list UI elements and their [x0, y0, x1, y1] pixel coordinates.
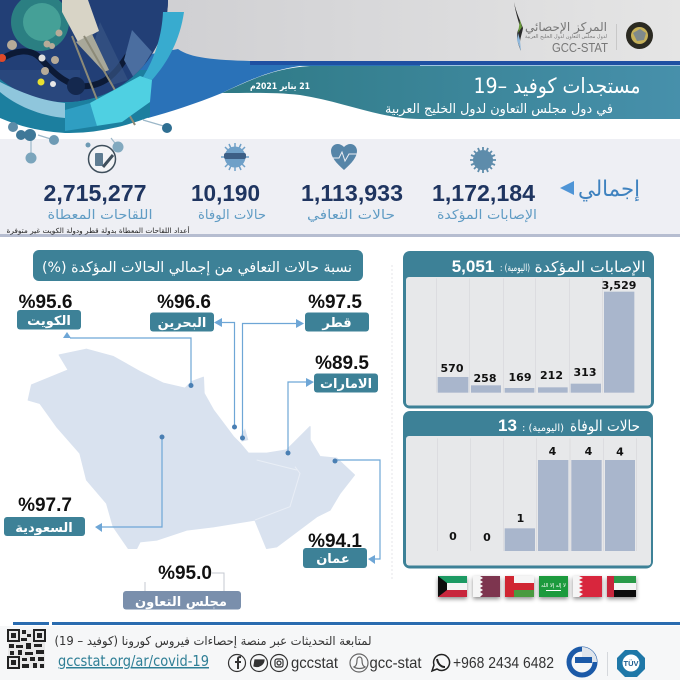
- heading: 5,051: [452, 257, 494, 276]
- hero image: vaccine circle: [0, 0, 184, 133]
- label: Qatar: [305, 292, 369, 332]
- panel: daily deaths: [403, 411, 653, 568]
- flag: Oman: [505, 576, 534, 597]
- URL: gccstat.org/ar/covid-19: [58, 652, 209, 670]
- stat: recovered: 1,113,933: [301, 180, 403, 206]
- label: Kuwait: [17, 292, 81, 330]
- bar chart: [437, 438, 637, 551]
- stat: vaccines: [44, 146, 152, 223]
- bar values: 313: [574, 366, 596, 379]
- heading: (اليومية) :: [522, 423, 564, 434]
- QR code: [8, 630, 45, 668]
- label: Kuwait: الكويت: [27, 314, 71, 329]
- heading: [498, 416, 640, 435]
- stat: confirmed: [432, 147, 537, 223]
- label: Qatar: %97.5: [308, 292, 362, 313]
- label: UAE: الامارات: [320, 377, 372, 392]
- connector dots: [160, 383, 338, 464]
- bar values: 258: [474, 372, 496, 385]
- phone: +968 2434 6482: [453, 655, 554, 672]
- stat: deaths: 10,190: [191, 180, 260, 206]
- bar values: 1: [517, 512, 524, 525]
- label: Bahrain: البحرين: [158, 316, 206, 331]
- heading: الإصابات المؤكدة: [534, 258, 646, 276]
- label: Saudi Arabia: [4, 495, 85, 536]
- bar values: 212: [540, 369, 563, 382]
- follow text: لمتابعة التحديثات عبر منصة إحصاءات فيروس كورونا (كوفيد – 19): [54, 634, 372, 649]
- bar values: 4: [549, 445, 557, 458]
- label: Saudi Arabia: السعودية: [15, 521, 73, 536]
- bar values: 3,529: [602, 279, 636, 292]
- stat: vaccines: اللقاحات المعطاة: [48, 208, 152, 223]
- social handle: gccstat: [291, 655, 339, 672]
- panel: daily confirmed cases: [403, 251, 654, 408]
- title: مستجدات كوفيد –19: [474, 74, 640, 98]
- heading: [452, 257, 646, 276]
- header background: [0, 0, 680, 139]
- decorative molecule: [8, 120, 172, 164]
- logo: certification ring: [569, 647, 597, 675]
- stat: deaths: [191, 143, 266, 223]
- bar values: 4: [616, 446, 624, 458]
- vaccine footnote: أعداد اللقاحات المعطاة بدولة قطر ودولة الكويت غير متوفرة: [6, 226, 190, 235]
- header title band: [222, 66, 680, 119]
- logo: TUV: TÜV: [624, 659, 638, 668]
- logo: GCC-STAT: GCC-STAT: [552, 40, 608, 55]
- flag: Kuwait: [438, 576, 467, 597]
- label: Bahrain: [150, 292, 214, 332]
- label: Kuwait: %95.6: [19, 292, 72, 313]
- connector arrows: [63, 318, 375, 564]
- label: Oman: عمان: [316, 552, 350, 567]
- icon: heart: [331, 144, 357, 170]
- bar values: 0: [483, 531, 491, 544]
- bar values: 570: [441, 362, 464, 375]
- bar values: 0: [449, 530, 457, 543]
- flag: UAE: [607, 576, 636, 597]
- label: Bahrain: %96.6: [157, 292, 211, 313]
- heading: (اليومية) :: [500, 263, 530, 274]
- flag: Qatar: [473, 576, 500, 597]
- subtitle: في دول مجلس التعاون لدول الخليج العربية: [385, 102, 613, 117]
- label: GCC: مجلس التعاون: [135, 595, 227, 610]
- flag: Bahrain: [573, 576, 602, 597]
- logo: GCC-STAT: المركز الإحصائي: [525, 20, 607, 35]
- logo: GCC-STAT: لدول مجلس التعاون لدول الخليج العربية: [525, 34, 607, 40]
- logo: TUV: [617, 650, 645, 677]
- bar values: [449, 445, 624, 544]
- icon: vial and syringe: [88, 146, 116, 172]
- emblem: [626, 22, 653, 49]
- stat: deaths: حالات الوفاة: [198, 208, 266, 223]
- logo: GCC-STAT: [514, 2, 653, 55]
- heading: [33, 250, 363, 281]
- label: GCC: %95.0: [158, 563, 212, 584]
- stat: recovered: [301, 144, 403, 223]
- map: [28, 349, 354, 548]
- label: UAE: [314, 353, 378, 392]
- bar chart: [436, 278, 634, 393]
- heading: حالات الوفاة: [570, 417, 640, 435]
- icon: whatsapp: [432, 654, 450, 671]
- bar values: 4: [585, 445, 593, 458]
- flag: Saudi Arabia: [539, 576, 568, 597]
- icon: virus with bed: [221, 143, 249, 171]
- icon: snapchat: [350, 654, 368, 672]
- snapchat handle: gcc-stat: [370, 655, 422, 672]
- bar values: [441, 279, 636, 385]
- date: 21 يناير 2021م: [250, 82, 310, 92]
- flag: Saudi Arabia: لا إله إلا الله: [541, 583, 566, 589]
- icons: social: [228, 654, 288, 672]
- bar values: 169: [509, 371, 531, 384]
- stat: total label: إجمالي: [578, 177, 640, 202]
- heading: نسبة حالات التعافي من إجمالي الحالات المؤكدة (%): [42, 260, 352, 276]
- label: Qatar: قطر: [321, 316, 352, 331]
- heading: 13: [498, 416, 517, 435]
- stat: vaccines: 2,715,277: [44, 180, 146, 206]
- stats band: [0, 139, 680, 237]
- label: Oman: %94.1: [308, 531, 362, 552]
- stat: confirmed: الإصابات المؤكدة: [437, 208, 537, 223]
- connector lines: [70, 322, 380, 559]
- label: UAE: %89.5: [315, 353, 369, 374]
- stat: confirmed: 1,172,184: [432, 180, 535, 206]
- icon: virus: [470, 147, 496, 173]
- footer: [0, 622, 680, 680]
- stat: recovered: حالات التعافي: [307, 208, 395, 223]
- panel: recovery ratio map: [4, 250, 380, 610]
- label: Saudi Arabia: %97.7: [18, 495, 72, 516]
- label: GCC: [123, 563, 241, 610]
- label: Oman: [303, 531, 367, 568]
- flags: [438, 576, 636, 597]
